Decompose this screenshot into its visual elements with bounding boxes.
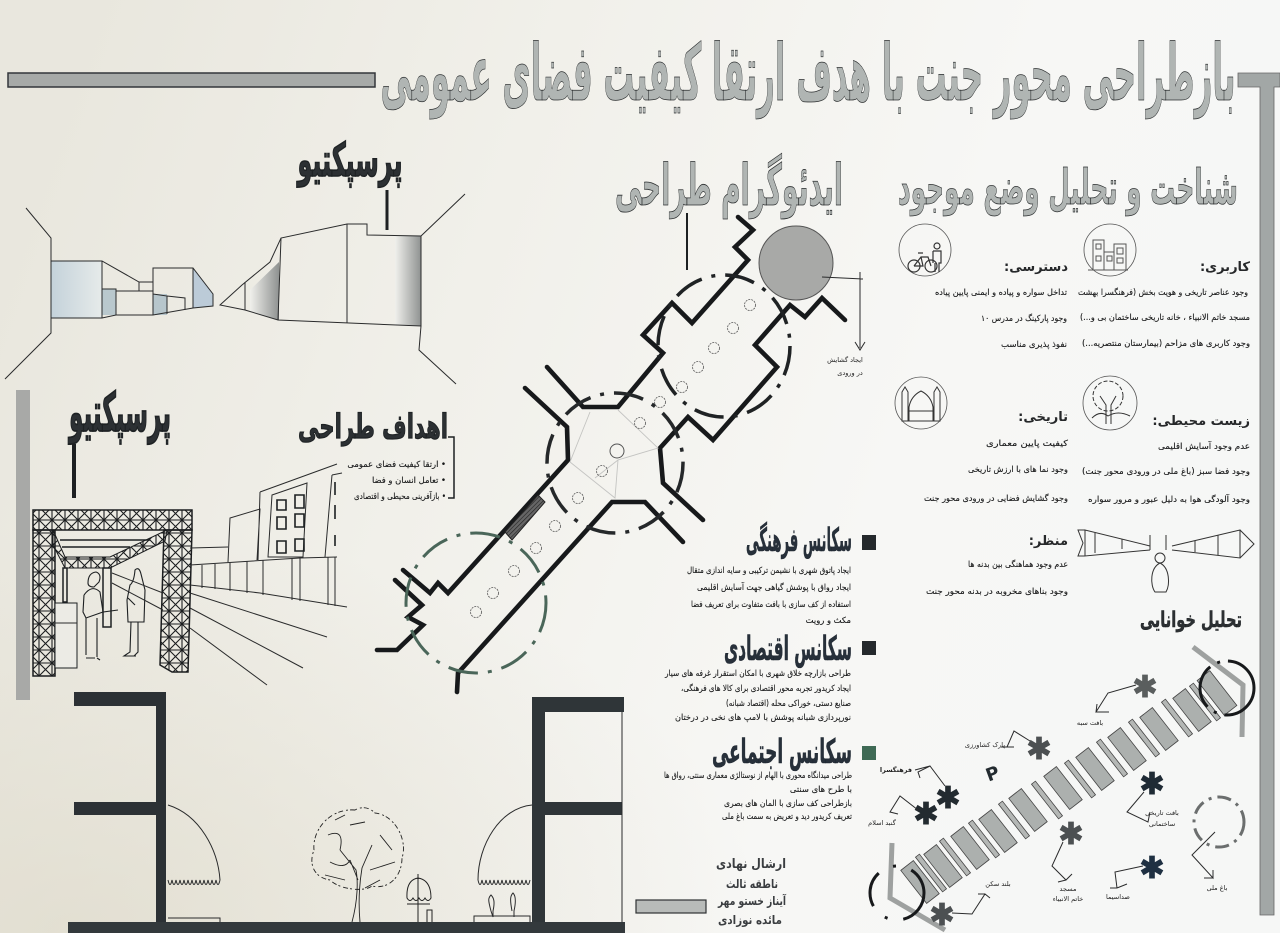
subheading: دسترسی:	[1004, 260, 1068, 275]
heading: سکانس فرهنگی	[746, 521, 852, 559]
icon: mosque	[895, 377, 947, 429]
leader line	[386, 190, 388, 230]
subheading: زیست محیطی:	[1152, 414, 1250, 429]
body text: وجود نما های با ارزش تاریخی	[968, 464, 1068, 474]
panel: street section	[68, 692, 625, 933]
landmarks: ✱	[913, 797, 939, 832]
body text: طراحی میدانگاه محوری با الهام از نوستالژی معماری سنتی، رواق ها	[664, 770, 852, 780]
credits: مائده نوزادی	[718, 913, 782, 928]
parking marker: P	[983, 762, 1003, 786]
heading leader	[686, 213, 688, 270]
body text: صنایع دستی، خوراکی محله (اقتصاد شبانه)	[726, 698, 851, 708]
body text: مسجد خاتم الانبیاء ، خانه تاریخی ساختمان بی و...)	[1080, 312, 1250, 323]
body text	[924, 438, 1068, 503]
marker	[862, 535, 876, 550]
title bar left	[8, 73, 375, 87]
credits	[716, 857, 787, 928]
landmark labels: مسجد	[1060, 885, 1076, 893]
landmark labels: فرهنگسرا	[880, 766, 912, 774]
left awning	[168, 805, 220, 922]
plaza thin lines	[570, 410, 658, 498]
panel: historic	[895, 377, 1068, 503]
leader lines	[890, 685, 1215, 914]
body text: وجود گشایش فضایی در ورودی محور جنت	[924, 493, 1068, 503]
heading: تحلیل خوانایی	[1140, 607, 1242, 632]
landmarks: ✱	[1058, 817, 1084, 852]
cafe table and umbrella	[407, 874, 432, 922]
goals list	[347, 459, 446, 501]
body text	[687, 565, 851, 625]
frame bar right	[1238, 73, 1280, 915]
body text: نفوذ پذیری مناسب	[1001, 339, 1067, 349]
gray opening circle	[759, 226, 833, 300]
street sketch left	[5, 208, 213, 379]
goals list: • تعامل انسان و فضا	[372, 475, 446, 485]
section people	[489, 893, 515, 917]
icon: viewer with view cones	[1078, 530, 1254, 592]
panel: legibility analysis	[868, 607, 1254, 933]
body text: کیفیت پایین معماری	[986, 438, 1068, 448]
body text	[935, 287, 1068, 349]
hatched segment	[505, 495, 545, 540]
body text: وجود فضا سبز (باغ ملی در ورودی محور جنت)	[1082, 466, 1250, 476]
left vertical bar	[16, 390, 30, 700]
trees along axis	[470, 300, 756, 618]
dashed circle lower	[406, 533, 546, 673]
dashed circle middle	[547, 393, 683, 533]
goals list: • ارتقا کیفیت فضای عمومی	[347, 459, 446, 469]
landmark labels: بافت سبه	[1077, 719, 1103, 727]
icon: buildings	[1084, 224, 1136, 276]
ground	[68, 922, 625, 933]
landmarks: ✱	[1139, 851, 1165, 886]
heading: سکانس اجتماعی	[712, 732, 852, 771]
landmarks: ✱	[1132, 670, 1158, 705]
landmark labels: بافت تاریخی	[1145, 809, 1179, 817]
body text: وجود کاربری های مزاحم (بیمارستان منتصریه...)	[1082, 338, 1250, 349]
landmark labels: بلند سکن	[985, 880, 1011, 888]
panel: perspective 1	[5, 134, 465, 384]
tree	[312, 808, 403, 922]
body text: استفاده از کف سازی با بافت متفاوت برای تعریف فضا	[691, 599, 851, 609]
bracket	[448, 437, 454, 498]
landmark labels: باغ ملی	[1207, 884, 1228, 892]
body text: با طرح های سنتی	[790, 784, 852, 794]
panel: access	[899, 224, 1068, 349]
panel: economic sequence	[664, 629, 876, 722]
heading: design goals: اهداف طراحی	[298, 408, 448, 447]
body text: طراحی بازارچه خلاق شهری با امکان استقرار غرفه های سیار	[664, 668, 851, 678]
marker	[862, 746, 876, 760]
heading: سکانس اقتصادی	[724, 629, 852, 668]
leader line	[72, 444, 76, 498]
landmark labels: ساختمانی	[1149, 820, 1175, 828]
callout text	[827, 356, 863, 377]
people	[83, 569, 145, 660]
subheading: منظر:	[1029, 534, 1068, 549]
panel: social sequence	[664, 732, 876, 821]
panel: design goals	[298, 408, 454, 501]
body text: عدم وجود هماهنگی بین بدنه ها	[968, 559, 1068, 569]
credits: ارشال نهادی	[716, 857, 786, 872]
body text	[926, 559, 1068, 596]
body text	[664, 668, 851, 722]
heading: perspective 2: پرسپکتیو	[68, 382, 171, 445]
street sketch right	[220, 194, 465, 384]
body text: تعریف کریدور دید و تعریض به سمت باغ ملی	[722, 811, 853, 821]
body text: تداخل سواره و پیاده و ایمنی پایین پیاده	[935, 287, 1068, 297]
heading: design ideogram: ایدئوگرام طراحی	[615, 152, 843, 219]
body text: بازطراحی کف سازی با المان های بصری	[724, 798, 852, 808]
callout text: در ورودی	[837, 369, 863, 377]
landmark labels: پارک کشاورزی	[965, 741, 1005, 749]
body text: وجود آلودگی هوا به دلیل عبور و مرور سواره	[1088, 493, 1250, 504]
landmark labels	[868, 719, 1228, 903]
dashed circle upper	[658, 275, 790, 417]
dashed garden circle	[1194, 797, 1244, 847]
icon: tree	[1083, 376, 1137, 430]
landmark labels: صداسیما	[1106, 893, 1130, 901]
landmarks: ✱	[935, 781, 961, 816]
right awning	[474, 805, 532, 922]
body text	[1082, 440, 1250, 504]
panel: land use	[1078, 224, 1250, 349]
credits: ناطقه ثالث	[726, 877, 778, 891]
body text: ایجاد پاتوق شهری با نشیمن ترکیبی و سایه اندازی متقال	[687, 565, 851, 575]
landmark labels: خاتم الانبیاء	[1053, 895, 1083, 903]
right building	[532, 697, 624, 925]
left building	[74, 692, 166, 925]
body text: ایجاد رواق با پوشش گیاهی جهت آسایش اقلیمی	[697, 581, 851, 592]
credits: آیناز خستو مهر	[717, 893, 787, 909]
panel: perspective 2	[33, 382, 347, 685]
marker	[862, 641, 876, 655]
truss structure	[33, 510, 192, 676]
lower gate	[870, 843, 945, 930]
building sketch	[190, 464, 347, 607]
body text: وجود بناهای مخروبه در بدنه محور جنت	[926, 586, 1068, 596]
body text: نورپردازی شبانه پوشش با لامپ های نخی در درختان	[675, 712, 851, 722]
body text: وجود عناصر تاریخی و هویت بخش (فرهنگسرا بهشت	[1078, 287, 1248, 297]
panel: view	[926, 530, 1254, 596]
subheading: کاربری:	[1200, 260, 1250, 275]
landmarks	[913, 670, 1165, 933]
body text: ایجاد کریدور تجربه محور اقتصادی برای کالا های فرهنگی،	[681, 683, 851, 693]
body text	[664, 770, 853, 821]
panel: environment	[1082, 376, 1250, 504]
panel: ideogram plan	[377, 217, 865, 692]
upper gate	[1193, 647, 1254, 737]
walls	[377, 217, 845, 692]
body text: عدم وجود آسایش اقلیمی	[1158, 440, 1250, 451]
heading: perspective 1: پرسپکتیو	[296, 134, 403, 188]
body text	[1078, 287, 1250, 349]
body text: مکث و رویت	[806, 615, 851, 625]
credits bar	[636, 900, 706, 913]
landmark labels: گنبد اسلام	[868, 819, 897, 827]
axis blocks	[901, 671, 1237, 903]
landmarks: ✱	[1139, 767, 1165, 802]
subheading: تاریخی:	[1018, 410, 1068, 425]
street lines	[112, 573, 327, 685]
panel: cultural sequence	[687, 521, 876, 625]
landmarks: ✱	[929, 898, 955, 933]
callout arrow	[822, 272, 865, 350]
callout text: ایجاد گشایش	[827, 356, 863, 364]
body text: وجود پارکینگ در مدرس ۱۰	[981, 313, 1067, 323]
icon: bicycle and pedestrian	[899, 224, 951, 276]
goals list: • بازآفرینی محیطی و اقتصادی	[354, 490, 446, 501]
landmarks: ✱	[1026, 732, 1052, 767]
